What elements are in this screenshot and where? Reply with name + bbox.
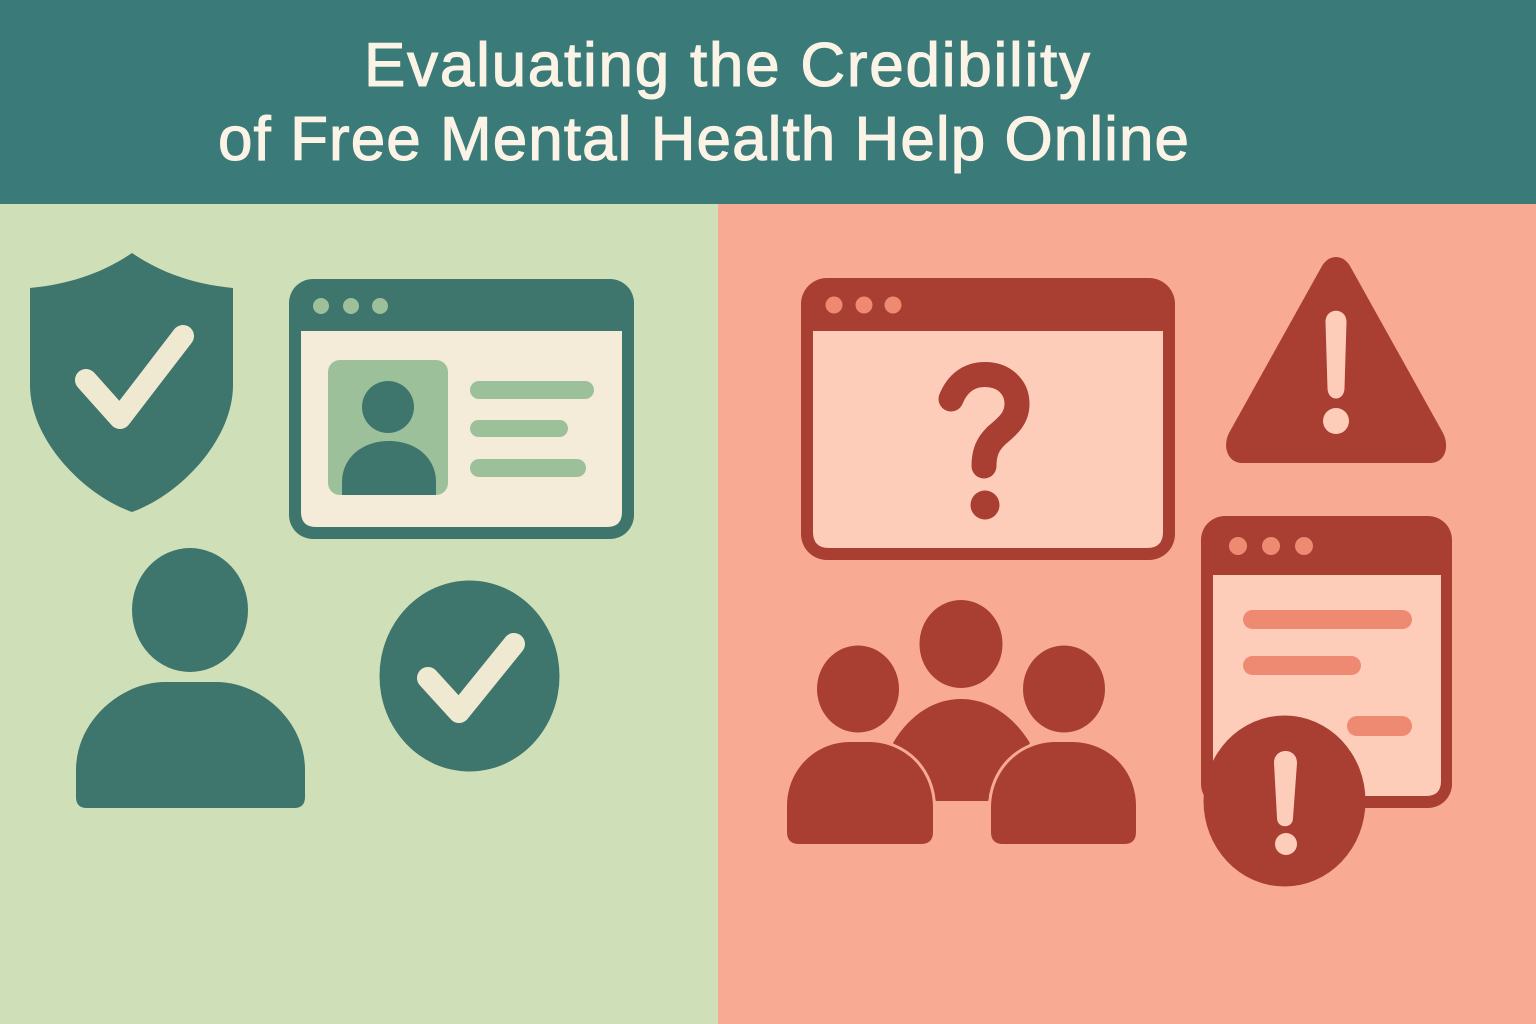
icon: check circle xyxy=(380,580,560,772)
icon: group of people xyxy=(787,600,1136,844)
title xyxy=(218,31,1189,174)
title: of Free Mental Health Help Online xyxy=(218,105,1189,174)
icon: browser question window xyxy=(801,278,1175,560)
header band xyxy=(0,0,1536,204)
icon: person xyxy=(76,548,305,808)
icon: browser profile window xyxy=(289,279,634,539)
panel: right warning background xyxy=(718,204,1536,1024)
icon: browser text window xyxy=(1201,516,1452,808)
icon: shield with check xyxy=(30,253,233,512)
panel: left credible background xyxy=(0,204,718,1024)
icon: alert circle xyxy=(1204,716,1366,886)
icon: warning triangle xyxy=(1226,257,1446,463)
title: Evaluating the Credibility xyxy=(364,31,1090,100)
